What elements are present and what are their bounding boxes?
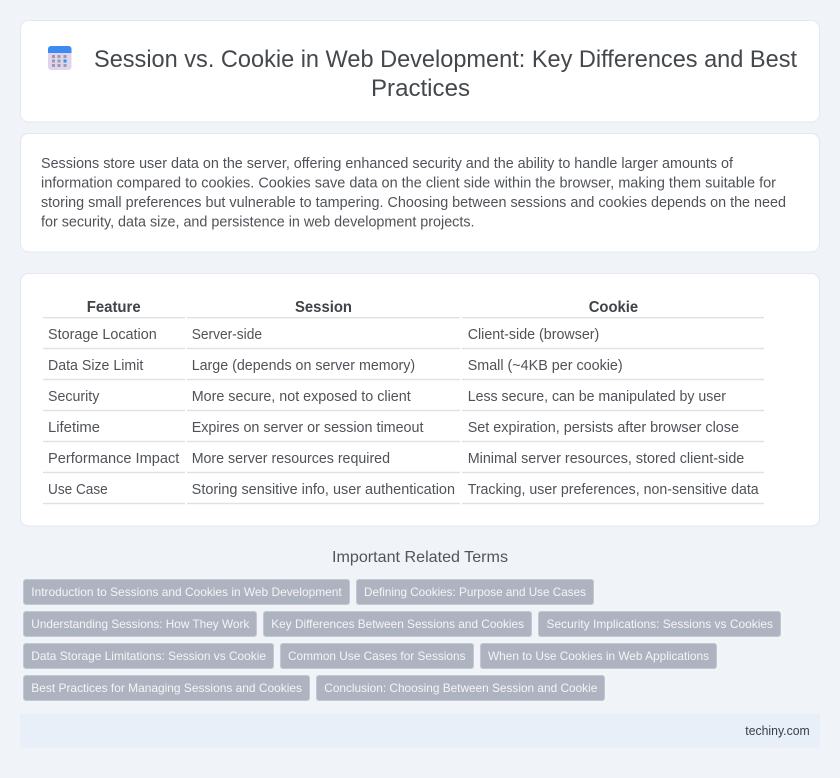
- row: security: Security: [48, 389, 100, 405]
- panel: header: [20, 20, 820, 122]
- table header row: Cookie: [589, 299, 638, 316]
- table header row: Feature: [87, 299, 141, 316]
- tag: [264, 612, 532, 636]
- panel: summary text: [20, 134, 820, 252]
- text block: summary paragraph: Sessions store user data on the server, offering enhanced security and the ability to handle larger amounts of: [41, 156, 734, 172]
- tag: [356, 580, 594, 604]
- row: data size limit: Data Size Limit: [48, 358, 143, 374]
- heading: important related terms: Important Related Terms: [332, 549, 508, 566]
- tag: Conclusion: Choosing Between Session and Cookie: [324, 681, 598, 695]
- row: data size limit: Small (~4KB per cookie): [468, 358, 623, 374]
- tag: Data Storage Limitations: Session vs Cookie: [31, 649, 266, 663]
- row: data size limit: [48, 358, 623, 374]
- row: storage location: [48, 327, 599, 343]
- tag: Security Implications: Sessions vs Cookies: [546, 617, 773, 631]
- row: security: [48, 389, 726, 405]
- table header row: [87, 299, 638, 316]
- tag: When to Use Cookies in Web Applications: [488, 649, 709, 663]
- tag: Introduction to Sessions and Cookies in Web Development: [31, 585, 342, 599]
- tag: [24, 676, 310, 700]
- tag: [538, 612, 780, 636]
- title: Session vs. Cookie in Web Development: Key Differences and Best: [94, 46, 797, 73]
- row: use case: Tracking, user preferences, non-sensitive data: [468, 482, 759, 498]
- row: data size limit: Large (depends on server memory): [192, 358, 415, 374]
- title: [94, 46, 797, 102]
- row: storage location: Client-side (browser): [468, 327, 599, 343]
- row: use case: Storing sensitive info, user authentication: [192, 482, 455, 498]
- icon: calendar: [48, 46, 72, 70]
- tag: [480, 644, 716, 668]
- panel: comparison table: [20, 274, 820, 526]
- text block: summary paragraph: storing small preferences but vulnerable to tampering. Choosing between sessions and cookies depends on the need: [41, 195, 786, 211]
- tag: [24, 612, 256, 636]
- related terms tags: [24, 580, 780, 700]
- table header row: Session: [295, 299, 352, 316]
- row: lifetime: Lifetime: [48, 420, 100, 436]
- text block: summary paragraph: information compared to cookies. Cookies save data on the client side within the browser, making them suitable for: [41, 176, 776, 192]
- tag: [24, 644, 274, 668]
- row: lifetime: [48, 420, 739, 436]
- row: storage location: Storage Location: [48, 327, 157, 343]
- row: use case: Use Case: [48, 482, 108, 498]
- text block: summary paragraph: for security, data size, and persistence in web development projects.: [41, 214, 474, 230]
- tag: [316, 676, 604, 700]
- row: performance impact: [48, 451, 744, 467]
- row: performance impact: Performance Impact: [48, 451, 179, 467]
- row: security: Less secure, can be manipulated by user: [468, 389, 726, 405]
- title: Practices: [371, 75, 470, 102]
- tag: [280, 644, 474, 668]
- row: use case: [48, 482, 759, 498]
- row: storage location: Server-side: [192, 327, 262, 343]
- row: performance impact: More server resources required: [192, 451, 390, 467]
- tag: Best Practices for Managing Sessions and Cookies: [31, 681, 302, 695]
- tag: Key Differences Between Sessions and Cookies: [271, 617, 524, 631]
- text block: summary paragraph: [41, 156, 786, 230]
- row: lifetime: Expires on server or session timeout: [192, 420, 424, 436]
- tag: Understanding Sessions: How They Work: [31, 617, 250, 631]
- tag: Defining Cookies: Purpose and Use Cases: [364, 585, 586, 599]
- footer credit: techiny.com: [745, 723, 810, 738]
- row: lifetime: Set expiration, persists after browser close: [468, 420, 739, 436]
- tag: Common Use Cases for Sessions: [288, 649, 466, 663]
- tag: [24, 580, 350, 604]
- footer: [20, 714, 820, 748]
- row: performance impact: Minimal server resources, stored client-side: [468, 451, 744, 467]
- row: security: More secure, not exposed to client: [192, 389, 411, 405]
